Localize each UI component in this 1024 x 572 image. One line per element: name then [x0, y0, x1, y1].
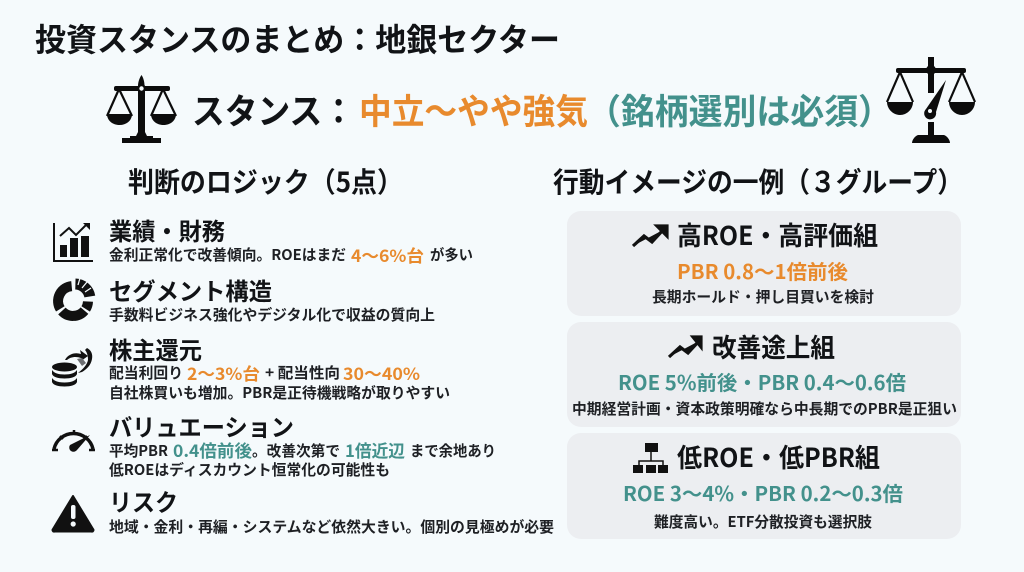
highlight: 0.4倍前後 [173, 437, 252, 462]
panel: item returns [52, 331, 450, 403]
item title: 業績・財務 [109, 212, 225, 247]
group action: 長期ホールド・押し目買いを検討 [652, 286, 874, 307]
group metric: ROE 3〜4%・PBR 0.2〜0.3倍 [623, 478, 903, 507]
group metric: ROE 5%前後・PBR 0.4〜0.6倍 [618, 367, 906, 396]
group action: 中期経営計画・資本政策明確なら中長期でのPBR是正狙い [572, 398, 957, 419]
heading: logic: 判断のロジック（5点） [128, 161, 403, 201]
icon: hierarchy [633, 443, 668, 473]
highlight: 30〜40% [343, 360, 420, 385]
item title: 株主還元 [109, 331, 202, 366]
stance label: スタンス： [192, 84, 355, 135]
item title: バリュエーション [109, 408, 294, 443]
group metric: PBR 0.8〜1倍前後 [677, 256, 848, 285]
item text second line: 低ROEはディスカウント恒常化の可能性も [109, 459, 390, 480]
icon: gauge [52, 430, 95, 452]
item text: 平均PBR [109, 440, 168, 461]
item text end: が多い [430, 244, 473, 265]
icon: donut chart [58, 278, 91, 316]
icon: trend arrow [669, 337, 701, 357]
card background [567, 433, 961, 539]
panel: high ROE group [567, 211, 961, 316]
item text: 配当利回り [109, 362, 183, 383]
item text: 金利正常化で改善傾向。ROEはまだ [109, 244, 346, 265]
icon: coins and arrow [52, 348, 92, 386]
highlight: 2〜3%台 [187, 360, 260, 385]
item text: 地域・金利・再編・システムなど依然大きい。個別の見極めが必要 [109, 516, 554, 537]
highlight: 4〜6%台 [351, 242, 424, 267]
icon: left balance scale [107, 75, 176, 143]
panel: item performance [54, 212, 473, 267]
icon: right balance scale with needle [887, 57, 975, 143]
highlight: 1倍近辺 [345, 437, 405, 462]
item text: + 配当性向 [265, 362, 340, 383]
icon: growth chart [54, 223, 93, 261]
item text: まで余地あり [410, 440, 496, 461]
item title: リスク [109, 483, 178, 518]
panel: low ROE group [567, 433, 961, 539]
group title: 高ROE・高評価組 [677, 216, 878, 253]
panel: item risk [53, 483, 554, 537]
item text: 手数料ビジネス強化やデジタル化で収益の質向上 [109, 304, 435, 325]
stance note: （銘柄選別は必須） [587, 84, 892, 135]
group title: 改善途上組 [712, 328, 835, 365]
card background [567, 211, 961, 316]
panel: item valuation [52, 408, 496, 480]
title: 投資スタンスのまとめ：地銀セクター [35, 15, 560, 61]
item text second line: 自社株買いも増加。PBR是正待機戦略が取りやすい [109, 382, 450, 403]
heading: action: 行動イメージの一例（３グループ） [553, 161, 963, 201]
panel: improving group [567, 322, 961, 427]
icon: warning triangle [53, 496, 93, 532]
item text: 。改善次第で [252, 440, 340, 461]
group title: 低ROE・低PBR組 [677, 438, 880, 475]
icon: trend arrow [633, 226, 667, 246]
group action: 難度高い。ETF分散投資も選択肢 [654, 511, 872, 532]
stance value: 中立〜やや強気 [359, 84, 588, 135]
item title: セグメント構造 [109, 272, 272, 307]
card background [567, 322, 961, 427]
panel: item segment [58, 272, 435, 325]
